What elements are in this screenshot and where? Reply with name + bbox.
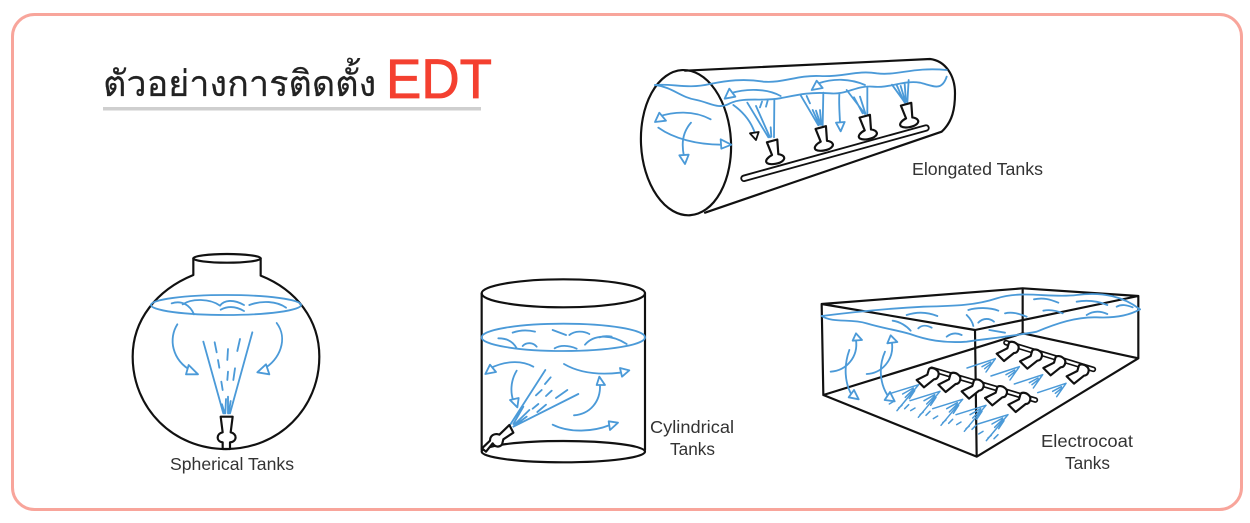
water surface (655, 69, 947, 106)
nozzles (917, 342, 1089, 412)
flow arrows (173, 323, 282, 374)
nozzle (482, 425, 513, 452)
flow arrows (655, 80, 865, 164)
title (103, 47, 492, 110)
diagram: spherical tank (133, 254, 319, 449)
pipe (744, 128, 926, 178)
tank outline (822, 288, 1138, 457)
spray (203, 332, 252, 413)
flow arrows (831, 333, 897, 401)
label: Electrocoat Tanks: Tanks (1065, 453, 1110, 473)
label: Cylindrical Tanks: Cylindrical (650, 417, 734, 437)
label: Spherical Tanks: Spherical Tanks (170, 454, 294, 474)
label: Cylindrical Tanks: Tanks (670, 439, 715, 459)
nozzle (218, 417, 236, 449)
diagram: cylindrical tank (482, 279, 645, 462)
water surface (151, 295, 301, 315)
label: Elongated Tanks: Elongated Tanks (912, 159, 1043, 179)
tank body (637, 59, 955, 218)
sprays (747, 80, 909, 137)
tank outline (482, 279, 645, 462)
spray (510, 370, 578, 427)
label: Electrocoat Tanks: Electrocoat (1041, 431, 1133, 451)
tank outline (133, 254, 319, 449)
pipes (932, 343, 1093, 400)
title: EDT (386, 47, 492, 110)
label: Electrocoat Tanks (1041, 431, 1133, 473)
water surface (822, 294, 1140, 342)
water surface (482, 324, 645, 351)
label: Cylindrical Tanks (650, 417, 734, 459)
nozzles (763, 102, 919, 165)
flow arrows (485, 362, 629, 431)
diagram: electrocoat tank (822, 288, 1140, 457)
sprays (889, 359, 1066, 441)
diagram: elongated tank (637, 59, 955, 218)
title: ตัวอย่างการติดตั้ง (103, 57, 376, 104)
